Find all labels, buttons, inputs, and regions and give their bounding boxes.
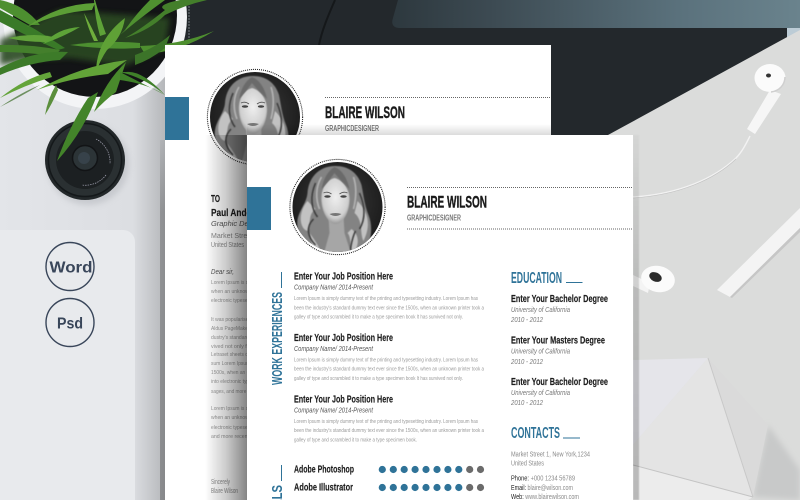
icon: Word badge: Word (50, 260, 92, 276)
text block: degree 3: 2010 - 2012 (510, 400, 543, 407)
heading: front page name block: BLAIRE WILSON (407, 192, 487, 212)
text block: job 1: Company Name/ 2014-Present (294, 282, 374, 292)
text block: letter body: sum Lorem Ipsum is simply dummy text of the printing and typesetting industry (211, 361, 381, 367)
text block: letter body: Aldus PageMaker including versions of Lorem Ipsum and more recently in print (211, 326, 381, 332)
skill: Adobe Illustrator (294, 482, 484, 494)
text block: job 1: galley of type and scrambled it to make a type specimen book It has survived not only. (294, 314, 463, 320)
text block: contact details: Market Street 1, New York,1234 (511, 452, 590, 458)
text block: letter recipient: United States (211, 242, 244, 249)
icon: Psd badge: Psd (57, 316, 83, 332)
text block: job 1: been the industry's standard dummy text ever since the 1500s, when an unknown printer took a (294, 306, 484, 312)
text block: letter body: Lorem Ipsum is simply dummy text of the printing and typesetting industry here (211, 280, 381, 286)
panel: front resume page (247, 135, 633, 500)
text block: letter recipient: Market Street 1, (211, 233, 261, 240)
heading: work experiences: WORK EXPERIENCES (269, 292, 286, 385)
text block: degree 3: Enter Your Bachelor Degree (511, 376, 608, 388)
icon: earbud and cable (633, 64, 786, 198)
background: desk surface (0, 0, 166, 500)
text block: degree 3 (510, 376, 608, 407)
text block: degree 1: Enter Your Bachelor Degree (511, 293, 608, 305)
text block: degree 2 (510, 334, 605, 366)
text block: degree 2: Enter Your Masters Degree (511, 334, 605, 346)
text block: job 2: galley of type and scrambled it to make a type specimen book It has survived not only. (294, 376, 463, 382)
background: dark desk mat (166, 0, 800, 135)
icon: white paper pyramid (633, 358, 800, 500)
text block: contact details: United States (511, 460, 544, 468)
heading: front page name block: GRAPHICDESIGNER (407, 214, 461, 222)
text block: letter body: and more recently with desktop publishing software like Aldus PageMaker (211, 434, 381, 440)
text block: job 1 (294, 270, 484, 320)
text block: letter signature (211, 479, 238, 495)
text block: letter recipient: TO (211, 193, 220, 205)
heading: back page name block: BLAIRE WILSON (325, 103, 405, 122)
text block: letter body: Lorem Ipsum is simply dummy text of the printing and typesetting industry here (211, 406, 381, 412)
text block: letter recipient: Graphic Designer (211, 219, 270, 228)
text block: job 2: Company Name/ 2014-Present (294, 344, 374, 353)
heading: contacts: CONTACTS (511, 425, 560, 442)
text block: job 3: Lorem Ipsum is simply dummy text of the printing and typesetting industry. Lorem Ipsum has (294, 419, 478, 425)
text block: job 1: Enter Your Job Position Here (294, 270, 393, 282)
text block: letter body: vived not only five centuries, but also the leap into electronic typesetting (211, 344, 381, 350)
text block: job 1: Lorem Ipsum is simply dummy text of the printing and typesetting industry. Lorem Ipsum has (294, 296, 478, 302)
background: tablet edge (392, 0, 800, 28)
text block: letter body: when an unknown printer took a galley of type and scrambled it to make one (210, 289, 381, 295)
icon: second earbud (633, 263, 677, 295)
text block: contact details: Phone: +000 1234 56789 (511, 476, 575, 482)
text block: letter body: sages, and more recently with desktop publishing software like Aldus PageMaker (211, 389, 381, 395)
text block: job 3: been the industry's standard dummy text ever since the 1500s, when an unknown printer took a (294, 428, 484, 434)
text block: letter body: 1500s, when an unknown printer took a galley of type and scrambled it to make (211, 370, 381, 376)
accent tab (165, 97, 189, 140)
text block: job 2: Enter Your Job Position Here (294, 332, 393, 344)
text block: letter body (210, 267, 381, 440)
text block: job 2: been the industry's standard dummy text ever since the 1500s, when an unknown printer took a (294, 366, 484, 372)
text block: job 2: Lorem Ipsum is simply dummy text of the printing and typesetting industry. Lorem Ipsum has (294, 358, 478, 364)
heading: back page name block: GRAPHICDESIGNER (325, 124, 379, 133)
text block: contact details (511, 452, 590, 500)
icon: Word badge (46, 242, 94, 290)
heading: front page name block (407, 188, 633, 229)
text block: letter body: electronic typesetting remaining essentially unchanged in the recent years now (211, 298, 381, 304)
photo: back page portrait (207, 69, 303, 165)
text block: degree 1: University of California (511, 307, 570, 314)
panel: software card (0, 230, 135, 500)
icon: camera lens (45, 120, 129, 205)
text block: job 3: Company Name/ 2014-Present (294, 406, 374, 414)
text block: degree 2: University of California (511, 348, 570, 356)
text block: letter recipient: Paul Anderson (211, 208, 269, 219)
text block: job 3: galley of type and scrambled it to make a type specimen book. (294, 438, 417, 444)
icon: potted plant (0, 0, 214, 161)
accent tab (247, 187, 271, 230)
text block: letter body: It was popularised in the 1960s with the release of Letraset sheets containing (211, 317, 381, 323)
text block: job 3: Enter Your Job Position Here (294, 394, 393, 406)
photo: front page portrait (290, 159, 386, 255)
skill: Adobe Photoshop: Adobe Photoshop (294, 464, 354, 476)
text block: degree 3: University of California (511, 390, 570, 397)
icon: Psd badge (46, 298, 94, 346)
text block: contact details: Email: blaire@wilson.com (511, 485, 573, 492)
heading: back page name block (325, 98, 551, 133)
skill: Adobe Illustrator: Adobe Illustrator (294, 482, 353, 494)
text block: letter body: when an unknown printer took a galley of type and scrambled it to make one (210, 415, 381, 421)
shadow cast by front page (160, 124, 639, 500)
text block: letter signature: Sincerely (211, 479, 230, 486)
icon: white pen (717, 208, 800, 298)
text block: job 3 (294, 394, 484, 444)
heading: education: EDUCATION (511, 270, 562, 287)
panel: back cover letter page (165, 45, 551, 500)
background: light desk right (560, 28, 800, 500)
text block: degree 2: 2010 - 2012 (510, 359, 543, 366)
text block: letter body: into electronic typesetting remaining essentially unchanged, it was popularised (211, 379, 381, 385)
text block: degree 1: 2010 - 2012 (510, 317, 543, 324)
text block: letter body: electronic typesetting remaining essentially unchanged in the recent years now (211, 425, 381, 431)
text block: letter body: dustry's standard dummy text ever since the 1500s when an unknown printer (211, 335, 381, 341)
text block: job 2 (294, 332, 484, 382)
text block: letter signature: Blaire Wilson (211, 488, 238, 495)
text block: letter body: Letraset sheets containing Lorem Ipsum passages, and more recently with desk (211, 352, 381, 358)
text block: letter body: Dear sir, (211, 267, 234, 276)
text block: degree 1 (510, 293, 608, 324)
text block: letter recipient (211, 193, 270, 249)
skill: Adobe Photoshop (294, 464, 484, 476)
